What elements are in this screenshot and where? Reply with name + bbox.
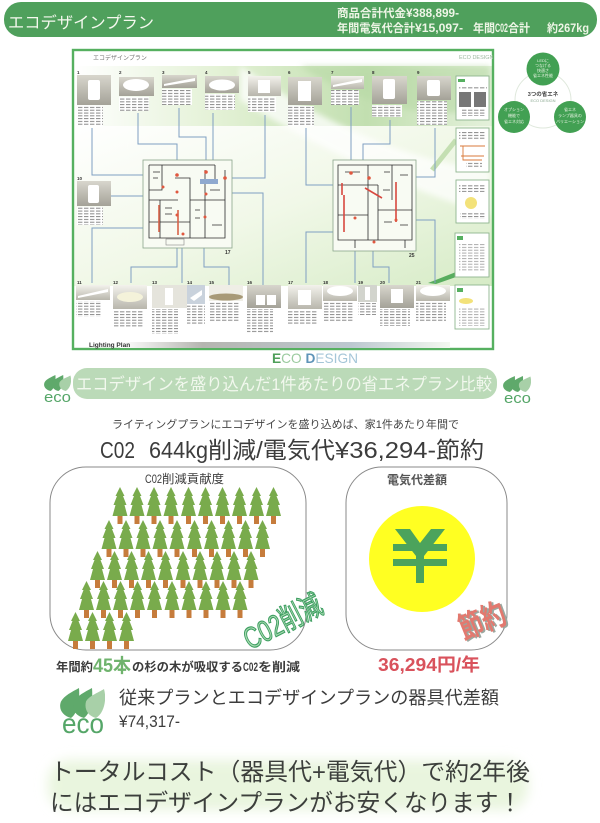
three energy-saving circles: 省エネ xyxy=(564,106,576,112)
three energy-saving circles: バリエーション xyxy=(556,119,584,124)
annual CO2 total: 合計 xyxy=(508,21,530,35)
product tiles bottom row: 19 xyxy=(358,280,364,285)
conclusion callout: にはエコデザインプランがお安くなります！ xyxy=(50,790,522,817)
icon: eco leaves large: eco xyxy=(62,708,104,739)
plan logo: ECO DESIGN xyxy=(459,55,494,61)
caption: 45 cedar trees: 45本 xyxy=(93,655,131,677)
fixture cost difference xyxy=(118,688,499,731)
stamp: savings: 節約 xyxy=(454,596,511,646)
ECO DESIGN wordmark: ECO DESIGN xyxy=(272,350,358,366)
caption: 45 cedar trees: を削減 xyxy=(258,659,300,674)
stamp: savings: 節約 xyxy=(455,597,513,647)
product tiles top row: 6 xyxy=(288,70,291,75)
annual CO2 total: C02 xyxy=(495,23,508,35)
product tiles bottom row: 12 xyxy=(113,280,119,285)
annual CO2 total: 267kg xyxy=(558,23,589,35)
chart: rows of cedar trees xyxy=(68,487,281,649)
panel: CO2 reduction xyxy=(50,467,328,656)
section banner: エコデザインを盛り込んだ1件あたりの省エネプラン比較 xyxy=(76,374,492,394)
product tiles bottom row: 21 xyxy=(416,280,422,285)
product tiles top row: 2 xyxy=(119,70,122,75)
product tiles bottom row: 18 xyxy=(323,280,329,285)
product tiles bottom row: 16 xyxy=(247,280,253,285)
icon: eco leaves right: eco xyxy=(504,390,531,407)
floor plan left xyxy=(143,160,232,256)
panel title: CO2: 削減貢献度 xyxy=(162,471,224,486)
product tiles top row: 9 xyxy=(417,70,420,75)
conclusion callout: トータルコスト（器具代+電気代）で約2年後 xyxy=(50,759,530,786)
icon: eco leaves right xyxy=(503,376,531,407)
product total price: ¥388,899- xyxy=(406,8,459,20)
annual electricity total: 年間電気代合計 xyxy=(337,21,415,35)
savings headline: ¥36,294- xyxy=(334,437,436,463)
yearly savings amount xyxy=(378,654,480,675)
panel: electricity difference xyxy=(346,467,513,650)
annual CO2 total: 約 xyxy=(547,21,558,35)
caption: 45 cedar trees: の杉の木が吸収する xyxy=(132,659,243,674)
panel: lighting plan sheet xyxy=(73,50,494,349)
lighting plan label xyxy=(120,342,450,348)
product tiles bottom row: 17 xyxy=(288,280,294,285)
panel title: CO2: C02 xyxy=(145,472,162,486)
savings headline: 節約 xyxy=(436,437,484,463)
side panels xyxy=(455,76,489,329)
floor plan left: 17 xyxy=(225,250,231,256)
savings headline: C02 xyxy=(100,437,135,463)
product tiles top row xyxy=(77,70,451,225)
icon: eco leaves left xyxy=(44,375,71,406)
product tiles top row: 5 xyxy=(248,70,251,75)
annual CO2 total xyxy=(473,21,589,35)
annual CO2 total: 年間 xyxy=(473,21,495,35)
icon: eco leaves large xyxy=(60,688,105,739)
three energy-saving circles: 快適さ xyxy=(537,67,549,73)
three energy-saving circles: 機能で xyxy=(508,112,520,118)
floor plan right: 25 xyxy=(409,253,415,259)
header title: エコデザインプラン xyxy=(8,13,154,32)
product total price xyxy=(337,6,459,20)
product tiles bottom row: 11 xyxy=(77,280,82,285)
connector lines xyxy=(92,107,435,285)
yearly savings amount: 36,294 xyxy=(378,655,437,675)
three energy-saving circles: LEDに xyxy=(537,58,549,63)
fixture cost value: ¥74,317- xyxy=(118,712,180,731)
fixture cost difference: 従来プランとエコデザインプランの器具代差額 xyxy=(119,688,499,708)
three energy-saving circles: ECO DESIGN xyxy=(530,98,556,103)
header bar xyxy=(4,2,597,37)
three energy-saving circles: 3つの省エネ xyxy=(528,90,559,98)
product tiles top row: 10 xyxy=(77,176,83,181)
three energy-saving circles: オプション xyxy=(504,106,524,112)
panel: lighting plan sheet: Lighting Plan xyxy=(89,342,130,349)
yearly savings amount: 円/年 xyxy=(437,654,480,675)
icon: yen coin xyxy=(369,506,475,612)
product tiles top row: 4 xyxy=(205,70,208,75)
three energy-saving circles: 省エネ性能 xyxy=(533,72,553,78)
three energy-saving circles: 省エネ対応 xyxy=(504,118,524,124)
floor plan right xyxy=(333,160,416,259)
section banner xyxy=(73,368,497,399)
intro text: ライティングプランにエコデザインを盛り込めば、家1件あたり年間で xyxy=(112,417,459,431)
product tiles top row: 3 xyxy=(162,70,165,75)
product tiles bottom row: 20 xyxy=(380,280,386,285)
savings headline: 644kg xyxy=(149,437,208,463)
annual electricity total: ¥15,097- xyxy=(415,23,463,35)
product tiles top row: 8 xyxy=(372,70,375,75)
panel title: electricity: 電気代差額 xyxy=(387,472,447,487)
product tiles bottom row: 13 xyxy=(152,280,158,285)
product total price: 商品合計代金 xyxy=(337,6,406,20)
icon: eco leaves left: eco xyxy=(44,389,71,406)
three energy-saving circles xyxy=(498,52,586,133)
product tiles bottom row: 15 xyxy=(209,280,215,285)
caption: 45 cedar trees: 年間約 xyxy=(56,659,93,674)
three energy-saving circles: つなげる xyxy=(535,62,551,68)
three energy-saving circles: ランプ器具の xyxy=(558,112,582,118)
conclusion callout xyxy=(48,759,530,817)
caption: 45 cedar trees xyxy=(56,655,300,677)
product tiles top row: 7 xyxy=(331,70,334,75)
savings headline xyxy=(100,437,484,463)
product tiles bottom row xyxy=(76,280,450,334)
plan heading: エコデザインプラン xyxy=(93,54,147,62)
annual electricity total xyxy=(337,21,463,35)
caption: 45 cedar trees: C02 xyxy=(243,660,258,674)
product tiles bottom row: 14 xyxy=(187,280,193,285)
stamp: CO2 reduction: C02削減 xyxy=(238,588,328,656)
product tiles top row: 1 xyxy=(77,70,80,75)
savings headline: 削減/電気代 xyxy=(208,437,335,463)
